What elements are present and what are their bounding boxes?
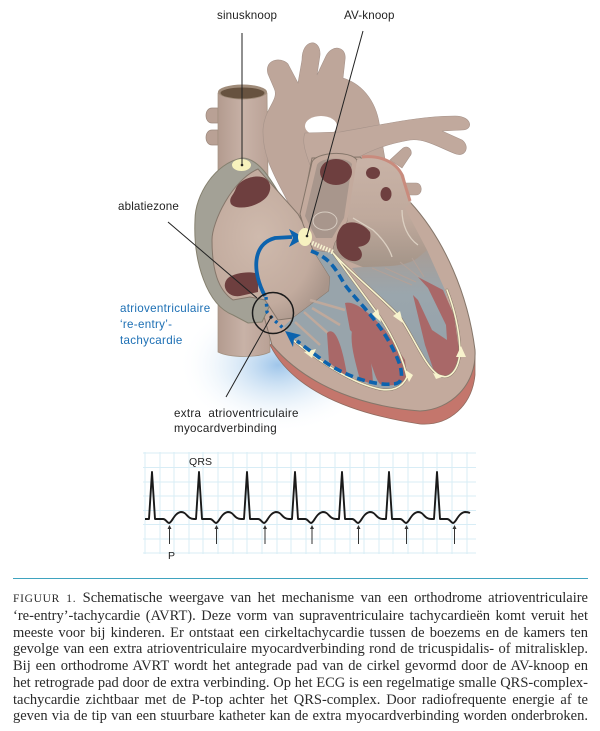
- caption: gevolge van een extra atrioventriculaire myocardverbinding rond de tricuspidalis- of mitralisklep.: [13, 641, 588, 657]
- aortic root interior: [305, 158, 352, 238]
- ECG grid: [143, 452, 476, 554]
- blue glow behind heart: [178, 297, 378, 433]
- left atrium pink edge: [362, 157, 410, 201]
- solid blue pathway: [256, 237, 292, 296]
- sinus node: [232, 159, 251, 171]
- label: ablatiezone: ablatiezone: [118, 200, 179, 213]
- bundle of His: [312, 243, 333, 252]
- label: extra myocardverbinding: myocardverbinding: [174, 422, 277, 435]
- caption: Bij een orthodrome AVRT wordt het antegrade pad van de cirkel gevormd door de AV-knoop en: [13, 658, 588, 674]
- chordae: [372, 258, 424, 285]
- left atrium vein stubs: [390, 147, 421, 195]
- trabeculae: [295, 300, 345, 345]
- label: P: P: [168, 550, 175, 562]
- left ventricle cavity: [352, 250, 458, 378]
- caption rule: [13, 578, 588, 579]
- right ventricle muscles: [327, 303, 407, 385]
- left atrium and ventricle upper wall: [332, 157, 427, 268]
- caption: het retrograde pad door de extra verbinding. Op het ECG is een regelmatige smalle QRS-complex-: [13, 675, 588, 691]
- aorta: [263, 43, 386, 222]
- vena cava with pulmonary vein stubs: [206, 84, 270, 356]
- blue arrowhead to AV node: [289, 229, 305, 247]
- left ventricle muscles: [413, 277, 459, 378]
- caption: [13, 590, 588, 724]
- yellow conduction pathways: [293, 253, 460, 390]
- label: sinusknoop: sinusknoop: [217, 9, 277, 22]
- label: atrioventriculaire re-entry tachycardie: ‘re-entry’-: [120, 318, 172, 331]
- right ventricle cavity: [284, 250, 407, 389]
- aortic root: [300, 153, 357, 253]
- dashed blue pathway: [297, 251, 401, 384]
- valve outline: [313, 212, 337, 230]
- right atrium interior: [212, 169, 330, 320]
- right atrium dark openings: [230, 177, 270, 208]
- caption: geven via de tip van een stuurbare katheter kan de extra myocardverbinding worden onderbroken.: [13, 708, 588, 724]
- label: atrioventriculaire re-entry tachycardie: tachycardie: [120, 334, 183, 347]
- caption: tachycardie zichtbaar met de P-top achter het QRS-complex. Door radiofrequente energie af te: [13, 692, 588, 708]
- label: AV-knoop: AV-knoop: [344, 9, 395, 22]
- conduction arrowheads: [304, 309, 466, 382]
- right atrium grey wall: [195, 158, 300, 323]
- leader lines: [168, 31, 363, 397]
- pulmonary vein openings: [366, 167, 392, 201]
- heart outer pink wall: [270, 320, 475, 424]
- caption: ‘re-entry’-tachycardie (AVRT). Deze vorm van supraventriculaire tachycardieën komt veruit het: [13, 608, 588, 624]
- caption: meeste voor bij kinderen. Er ontstaat een cirkeltachycardie tussen de boezems en de kamers ten: [13, 624, 588, 640]
- blue dotted extra connection: [266, 297, 283, 328]
- aortic arch opening: [305, 116, 337, 136]
- heart body: [258, 157, 475, 411]
- aortic dark lumen: [320, 159, 352, 185]
- P-wave arrows: [168, 525, 456, 544]
- pulmonary artery: [304, 116, 470, 170]
- ECG trace: [145, 472, 470, 523]
- label: QRS: QRS: [189, 456, 212, 468]
- left atrium dark chamber: [336, 222, 370, 261]
- caption: FIGUUR 1. Schematische weergave van het mechanisme van een orthodrome atrioventriculaire: [13, 590, 588, 606]
- label: extra myocardverbinding: extra atrioventriculaire: [174, 407, 299, 420]
- mitral valve lines: [353, 210, 418, 257]
- ablation zone circle: [252, 292, 294, 334]
- label: atrioventriculaire re-entry tachycardie: atrioventriculaire: [120, 302, 210, 315]
- blue arrowhead lower: [285, 331, 301, 347]
- AV node: [298, 228, 312, 246]
